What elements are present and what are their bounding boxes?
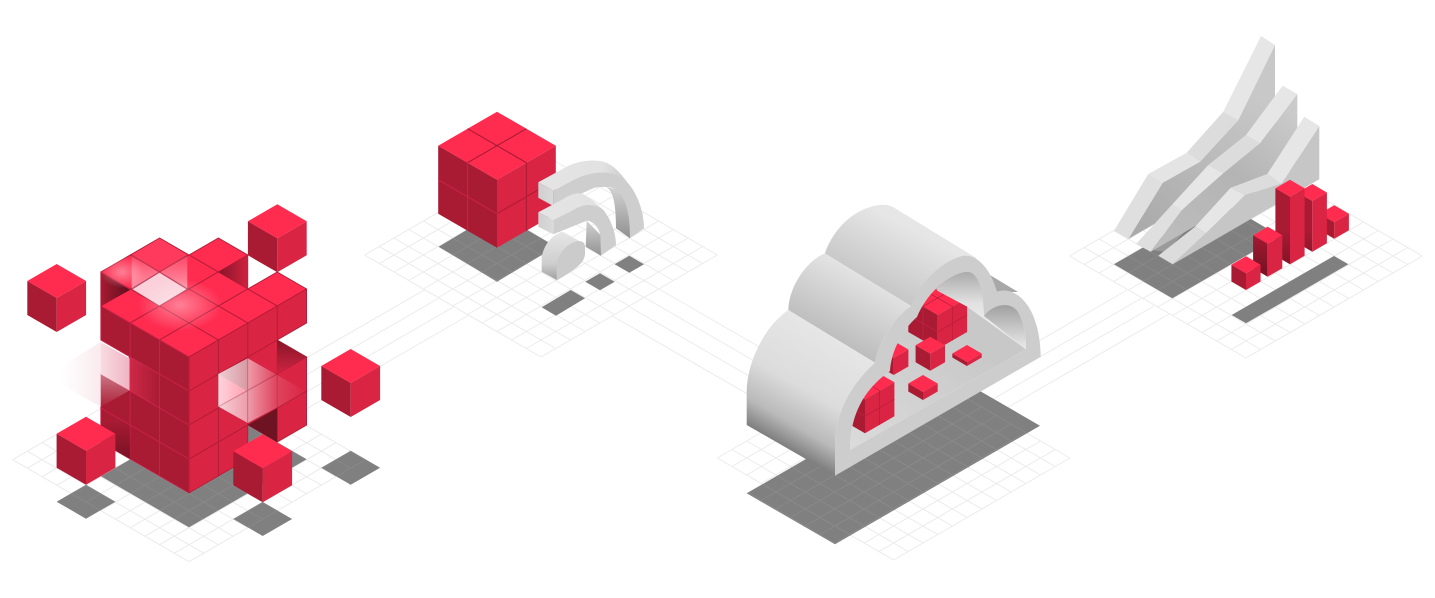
ridge shadow xyxy=(1114,208,1267,298)
floating cube right xyxy=(321,349,380,417)
middle ridge xyxy=(1136,86,1297,252)
bar 1 tallest xyxy=(1275,180,1305,264)
scene: cube with wifi signal xyxy=(438,112,644,316)
cloud top lobe xyxy=(825,205,977,333)
cloud front lobe xyxy=(747,310,875,476)
scene: exploding red data cube xyxy=(27,204,380,536)
cloud middle lobe xyxy=(788,253,911,363)
scene: cloud xyxy=(746,204,1041,544)
voxel stack xyxy=(101,238,307,493)
interior tile lower xyxy=(908,375,938,400)
floor grid: cloud xyxy=(717,356,1070,560)
wifi shadows xyxy=(542,256,644,316)
floor grid: wifi xyxy=(365,153,717,357)
interior large cube top xyxy=(908,281,967,349)
floating cube left xyxy=(27,264,86,332)
cube shadow xyxy=(438,230,548,282)
cloud back strip xyxy=(990,275,1018,292)
back ridge xyxy=(1114,36,1275,239)
gap shadow between ridges xyxy=(1152,228,1188,252)
floor grid: chart xyxy=(1070,154,1422,358)
cube stack shadow xyxy=(101,426,306,528)
interior ceiling edge xyxy=(936,272,1024,348)
connector lines between grids xyxy=(248,289,1169,419)
bar 3 short right xyxy=(1320,205,1349,239)
cloud interior xyxy=(850,272,1026,450)
interior large cube lower xyxy=(852,376,894,434)
interior right arch xyxy=(984,305,1026,345)
red 2x2 cube xyxy=(438,112,556,248)
interior partial cube xyxy=(888,343,908,375)
front ridge xyxy=(1158,117,1319,264)
scene: rising chart xyxy=(1114,36,1349,324)
floating cube lower left xyxy=(57,417,115,485)
bar shadow xyxy=(1232,256,1348,323)
right light window xyxy=(218,358,307,423)
bar 2 tall xyxy=(1298,184,1327,252)
bar 5 small xyxy=(1231,256,1261,290)
interior tile right xyxy=(952,345,982,366)
wifi middle arc xyxy=(538,193,616,256)
floating cube top right xyxy=(248,204,307,272)
wifi outer arc xyxy=(538,161,644,238)
left light window xyxy=(62,342,130,407)
floating cube lower right xyxy=(233,434,292,502)
small cube shadows xyxy=(56,450,380,536)
bar 4 medium xyxy=(1253,227,1282,277)
interior cube middle xyxy=(916,337,945,371)
top light window xyxy=(100,238,222,331)
floor grid: data cube xyxy=(13,358,365,562)
wifi dot xyxy=(542,232,585,280)
cloud shadow xyxy=(746,392,1040,544)
cloud front face xyxy=(835,256,1041,476)
stack shading in the gaps xyxy=(101,255,307,459)
